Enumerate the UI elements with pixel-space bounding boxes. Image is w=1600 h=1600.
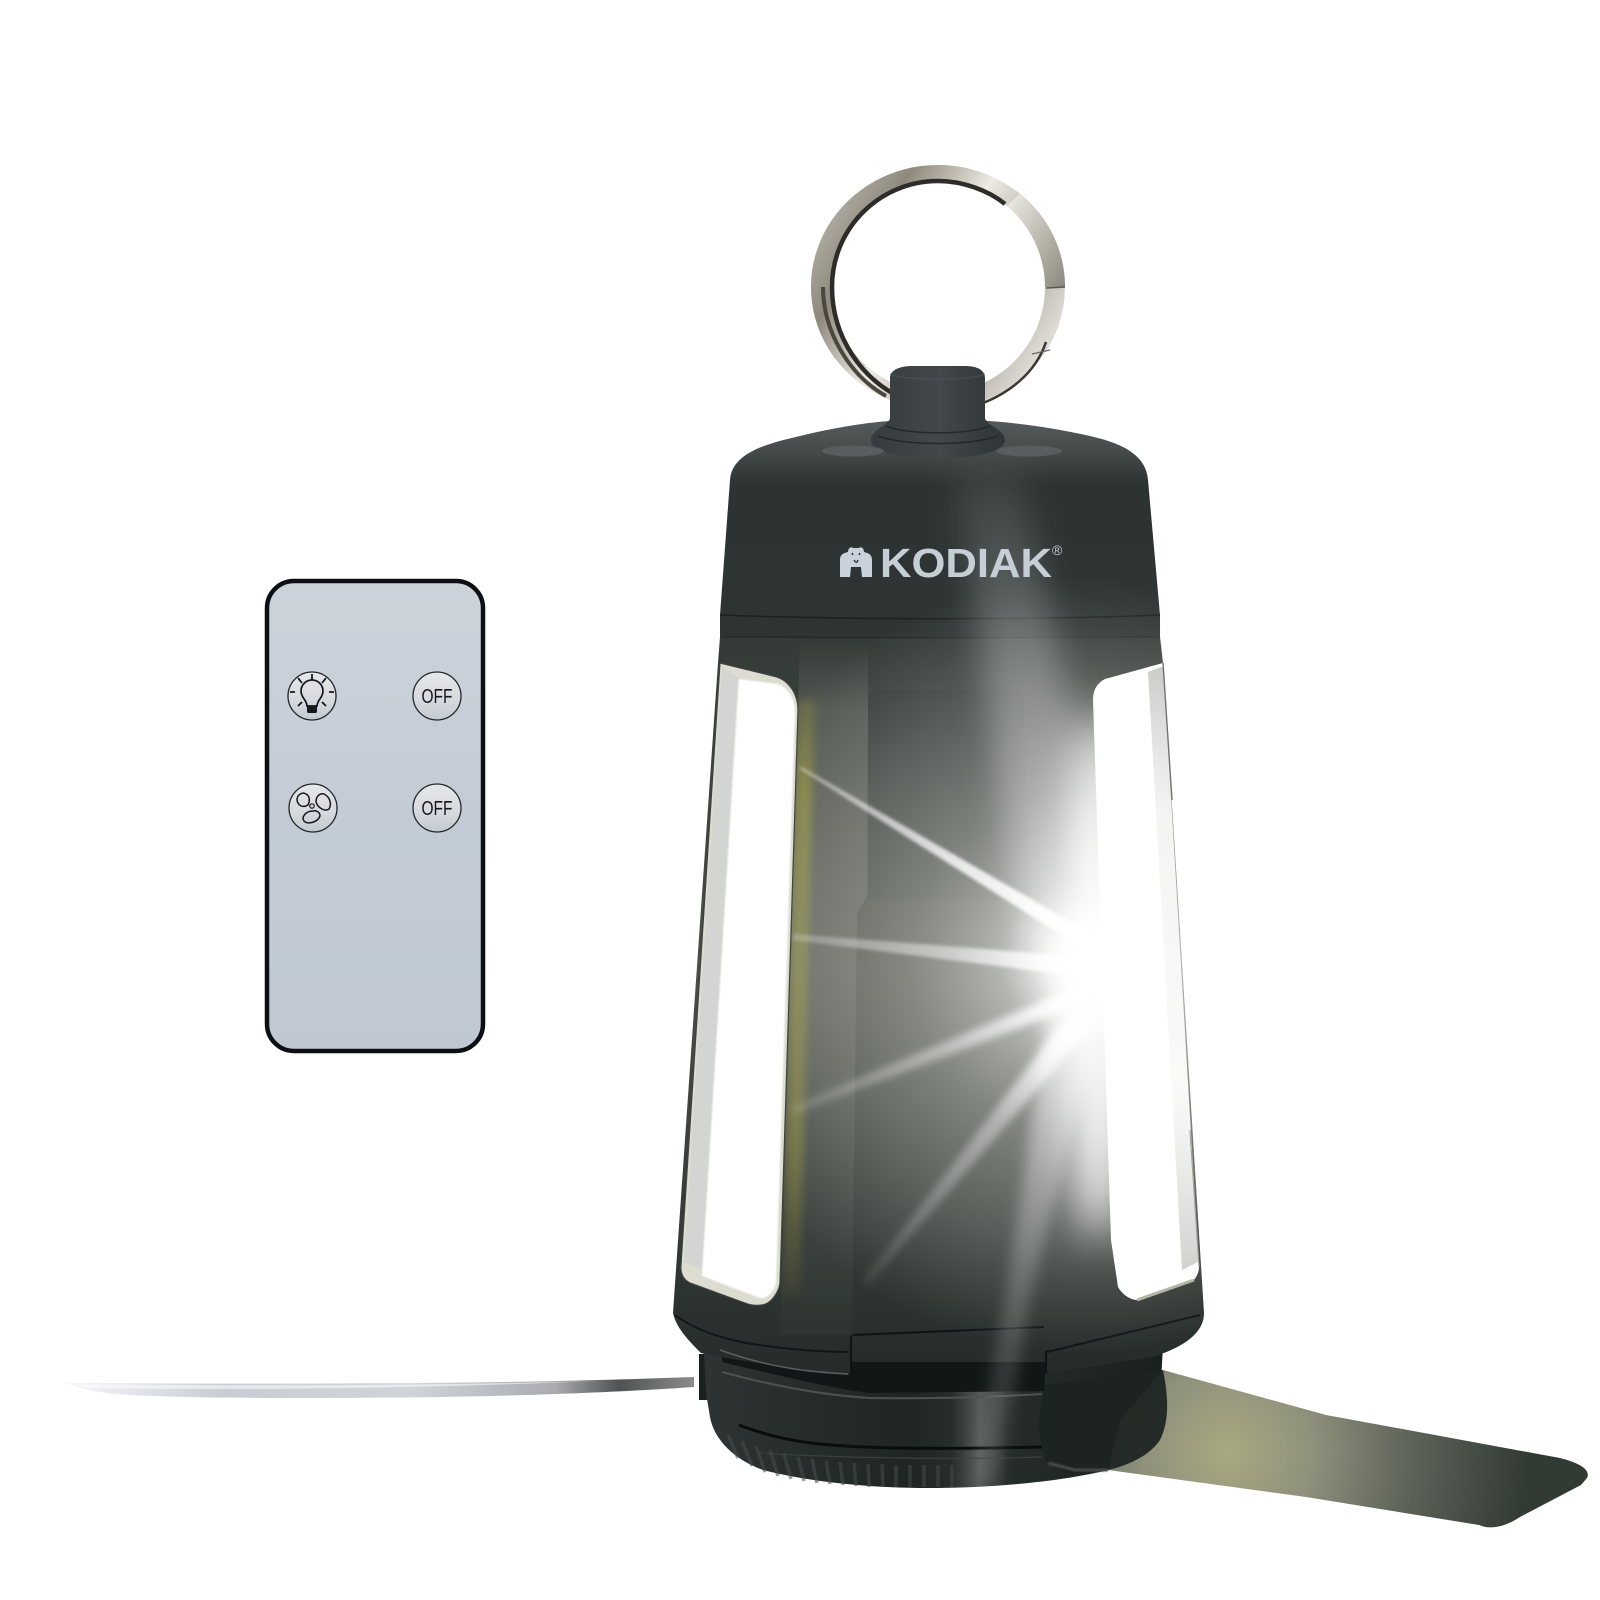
base shadow gap under body xyxy=(722,1350,1045,1393)
remote body xyxy=(267,581,483,1051)
ring inner shadow lines xyxy=(832,181,1005,398)
light flare xyxy=(793,710,1156,1285)
ring flat band xyxy=(1007,194,1065,287)
flare core xyxy=(1060,917,1156,1013)
flare rays xyxy=(793,766,1092,1285)
right glass strip xyxy=(1148,666,1198,1270)
remote control xyxy=(267,581,483,1051)
off button: fan xyxy=(413,784,461,832)
wordmark: KODIAK xyxy=(880,540,1052,586)
blade lower hub edge xyxy=(1048,1463,1108,1470)
window bloom xyxy=(1064,710,1132,1240)
off button: light: OFF xyxy=(422,686,452,708)
right fan blade xyxy=(1038,1370,1588,1527)
downward beam xyxy=(975,1013,1082,1478)
right window xyxy=(1093,663,1199,1300)
knob on top xyxy=(822,366,1062,458)
top cap xyxy=(720,419,1160,637)
bottom left seam xyxy=(675,1315,849,1352)
base housing xyxy=(704,1345,1163,1488)
icon: fan button xyxy=(289,784,337,832)
base band top highlight xyxy=(722,1372,1042,1398)
center panel xyxy=(866,690,1030,900)
icon: light button xyxy=(288,672,336,720)
panel seams xyxy=(851,1315,1200,1375)
light glow on body xyxy=(784,472,1204,1478)
left glass strip xyxy=(684,668,738,1268)
top buttons xyxy=(822,446,884,456)
lantern body xyxy=(673,419,1204,1375)
off button: fan: OFF xyxy=(422,798,452,820)
registered mark: ® xyxy=(1052,542,1063,558)
brand logo xyxy=(840,540,1063,586)
metal key ring xyxy=(811,165,1065,409)
radial body glow xyxy=(784,600,1204,1332)
icon: bear xyxy=(840,547,872,577)
upward beam on cap xyxy=(956,472,1087,952)
off button: light xyxy=(413,672,461,720)
left light core xyxy=(702,679,795,1298)
olive glow beside left window xyxy=(783,700,815,1295)
blade clip at hub xyxy=(699,1354,707,1400)
band seam xyxy=(720,615,1160,619)
blade overlap over hub xyxy=(1038,1370,1167,1474)
lower body shell xyxy=(673,637,1204,1375)
left body strip xyxy=(780,640,868,1335)
left fan blade xyxy=(66,1354,707,1400)
base ribbed ring xyxy=(728,1425,1042,1487)
left window xyxy=(681,663,798,1305)
